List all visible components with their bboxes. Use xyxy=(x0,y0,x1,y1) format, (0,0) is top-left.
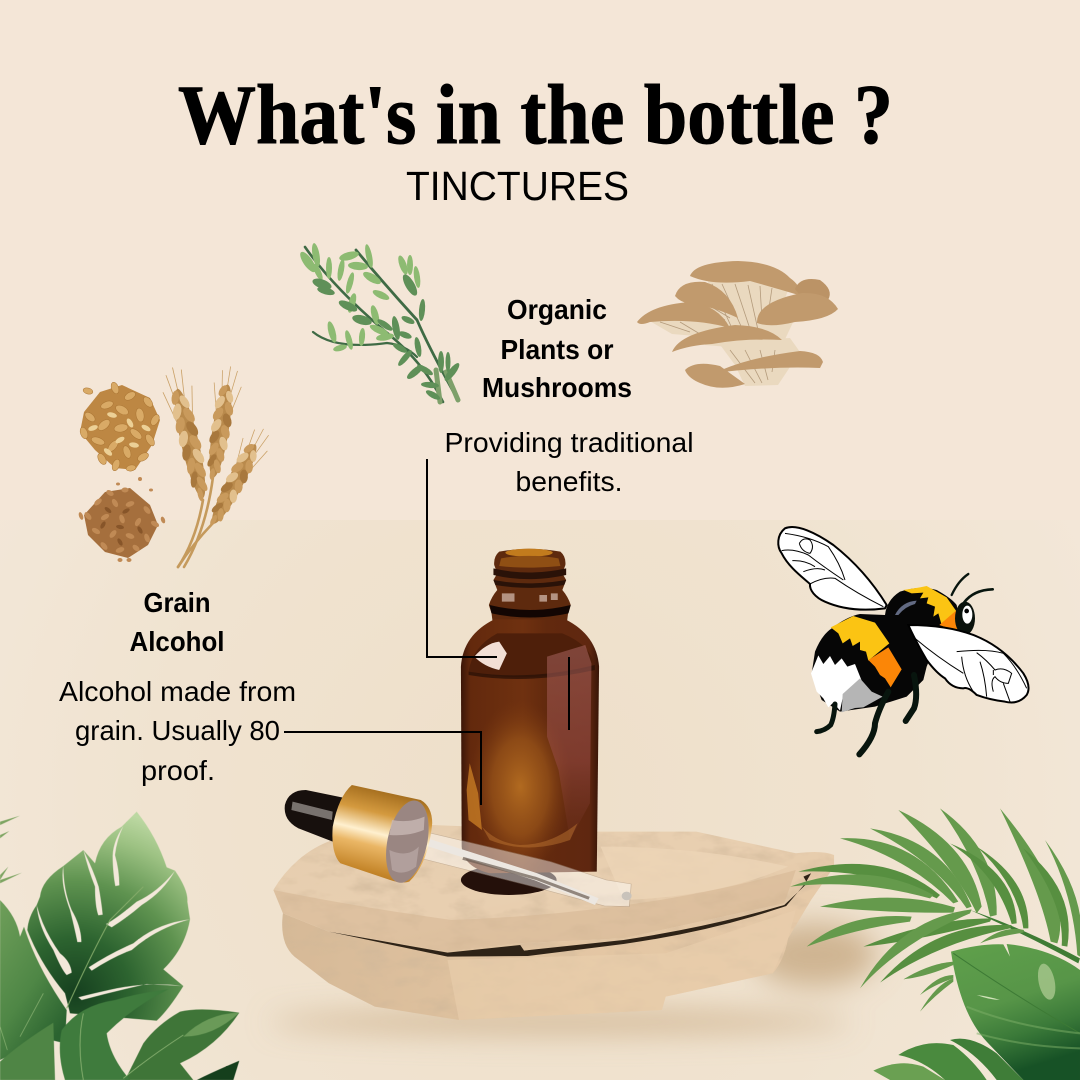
dropper bulb xyxy=(285,790,346,842)
illustration: bumble bee xyxy=(778,527,1029,754)
small fronds xyxy=(0,816,22,883)
text: plant benefits description: benefits. xyxy=(516,466,622,497)
pile of barley seeds xyxy=(78,477,166,562)
text: grain alcohol description: proof. xyxy=(141,755,215,786)
head xyxy=(955,602,975,635)
illustration: monstera leaves bottom left xyxy=(0,812,239,1080)
leader lines xyxy=(284,459,569,805)
stone crack xyxy=(329,873,811,957)
lower leaves xyxy=(873,1039,1023,1080)
lower leaves xyxy=(0,989,239,1080)
text: plant benefits description xyxy=(444,427,694,497)
text: grain alcohol description: grain. Usually 80 xyxy=(75,715,280,746)
illustration: thyme herb sprig xyxy=(297,243,462,402)
lower wing xyxy=(908,625,1029,702)
text: organic plants or mushrooms heading: Mushrooms xyxy=(482,372,632,403)
illustration: oyster mushrooms xyxy=(637,261,838,388)
upper wing xyxy=(778,527,887,610)
illustration: amber bottle xyxy=(461,549,599,895)
lower stone slab xyxy=(282,867,834,1020)
palm frond xyxy=(790,808,1080,1012)
illustration: wheat stalks xyxy=(158,364,276,567)
illustration: palm and leaf bottom right xyxy=(790,808,1080,1080)
abdomen and thorax xyxy=(811,586,960,712)
far left leaf xyxy=(0,900,67,1060)
bottle neck xyxy=(489,549,571,630)
illustration: dropper xyxy=(285,785,632,907)
title: What's in the bottle ? xyxy=(178,68,893,162)
subtitle: TINCTURES xyxy=(406,163,629,209)
gold cap xyxy=(332,785,435,886)
text: plant benefits description: Providing traditional xyxy=(444,427,694,458)
bottle highlights xyxy=(474,642,507,670)
text: organic plants or mushrooms heading: Plants or xyxy=(500,334,614,365)
bottle base shadow xyxy=(461,865,557,895)
illustration: grain piles xyxy=(78,381,166,562)
text: grain alcohol heading: Grain xyxy=(144,587,210,618)
text: organic plants or mushrooms heading xyxy=(482,294,632,403)
upper dark shoulder xyxy=(469,633,595,677)
glass tube xyxy=(415,832,632,907)
monstera leaf xyxy=(27,812,190,1021)
upper stone slab xyxy=(273,825,834,952)
legs and antennae xyxy=(817,574,993,754)
pile of wheat kernels xyxy=(79,381,161,472)
liquid glow xyxy=(469,700,572,873)
big leaf xyxy=(951,944,1080,1080)
bottle body xyxy=(461,619,599,873)
text: grain alcohol heading: Alcohol xyxy=(130,626,224,657)
text: grain alcohol heading xyxy=(130,587,224,657)
illustration: stone base xyxy=(273,825,834,1020)
text: grain alcohol description: Alcohol made from xyxy=(59,676,296,707)
text: organic plants or mushrooms heading: Organic xyxy=(507,294,607,325)
text: grain alcohol description xyxy=(59,676,296,786)
stone shadow xyxy=(270,923,877,1034)
